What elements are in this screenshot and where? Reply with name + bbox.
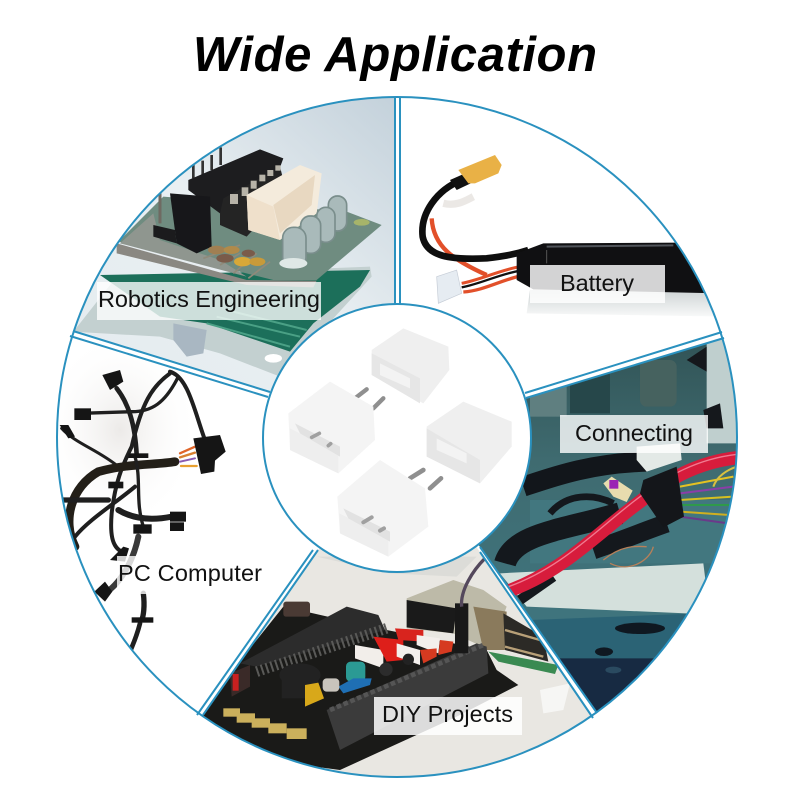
label: Battery: Battery: [560, 270, 634, 296]
label: Connecting: [560, 415, 708, 453]
label: PC Computer: PC Computer: [118, 560, 262, 586]
panel: DIY projects: [203, 548, 590, 776]
label: Connecting: Connecting: [575, 420, 693, 446]
outer ring: [57, 97, 737, 777]
label: DIY Projects: DIY Projects: [382, 701, 513, 727]
label: Battery: [530, 265, 665, 303]
connector housing: top: [372, 328, 449, 403]
panel: connecting: [478, 340, 736, 711]
label: PC Computer: [117, 556, 263, 594]
title: Wide Application: [193, 28, 597, 82]
connector header: left: [288, 382, 383, 473]
label: DIY Projects: [374, 697, 522, 735]
label: Robotics Engineering: Robotics Engineering: [98, 286, 320, 312]
label: Robotics Engineering: [97, 282, 321, 320]
panel: robotics engineering: [75, 98, 394, 392]
connector housing: right: [427, 402, 512, 483]
connector header: bottom: [337, 460, 441, 557]
panel: battery: [419, 155, 713, 316]
panel: PC computer: [60, 370, 262, 650]
center circle: [263, 304, 531, 572]
